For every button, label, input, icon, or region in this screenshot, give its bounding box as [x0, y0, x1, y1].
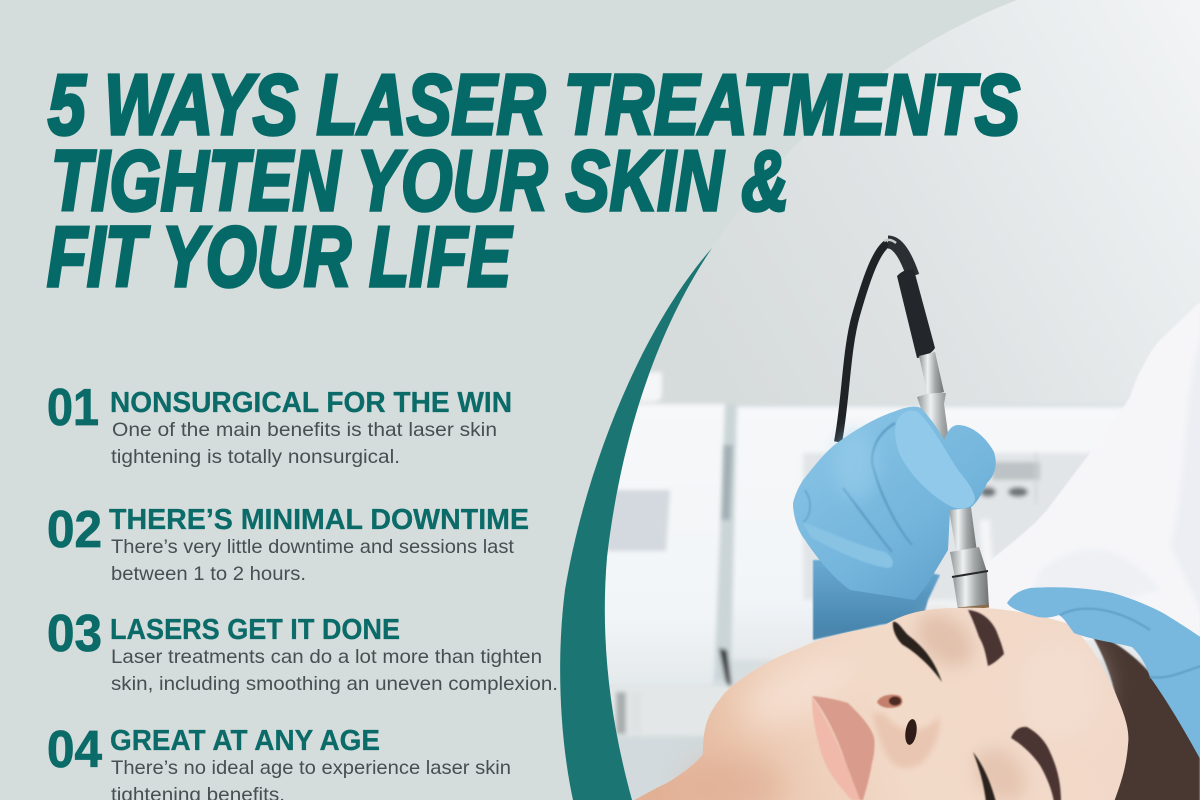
body 03: Laser treatments can do a lot more than tighten	[111, 646, 542, 668]
title	[47, 58, 1020, 305]
face: nose shading	[872, 712, 940, 768]
item 03	[47, 605, 558, 695]
glove lower finger	[802, 522, 893, 568]
body 04: There’s no ideal age to experience laser skin	[111, 757, 511, 779]
body 04	[111, 757, 511, 800]
teal crescent	[560, 248, 712, 800]
item 04	[47, 721, 511, 800]
face: upper eyebrow	[968, 610, 1004, 666]
face: lower eye socket shading	[972, 746, 1028, 800]
face: cheek side shading	[685, 755, 785, 800]
photo: white treatment machines	[605, 371, 1142, 735]
heading 02: THERE’S MINIMAL DOWNTIME	[109, 504, 529, 536]
photo: black cable	[838, 240, 913, 442]
photo: glove on forehead	[1007, 587, 1200, 768]
photo: woman's hair	[1090, 632, 1200, 800]
body 02: between 1 to 2 hours.	[111, 563, 306, 585]
title: FIT YOUR LIFE	[47, 210, 513, 305]
face: lower closed eye	[973, 752, 996, 800]
heading 01: NONSURGICAL FOR THE WIN	[110, 387, 512, 419]
face: lower eyebrow	[1011, 727, 1061, 800]
body 01: tightening is totally nonsurgical.	[111, 446, 400, 468]
face: nostrils	[877, 695, 918, 746]
body 02: There’s very little downtime and sessions last	[111, 536, 515, 558]
face: eye socket shading	[914, 606, 976, 670]
face: lips	[812, 696, 875, 800]
photo: laser skin treatment	[600, 0, 1200, 800]
glove index finger	[895, 410, 975, 508]
face: cheek highlight	[744, 636, 844, 728]
photo: laser wand	[897, 270, 989, 610]
heading 04: GREAT AT ANY AGE	[110, 725, 380, 757]
face: temple highlight	[1094, 639, 1119, 700]
body 01: One of the main benefits is that laser skin	[112, 419, 497, 441]
number 03: 03	[47, 605, 102, 663]
item 01	[47, 379, 512, 468]
body 03: skin, including smoothing an uneven complexion.	[111, 673, 558, 695]
number 04: 04	[47, 721, 102, 779]
body 03	[111, 646, 558, 695]
body 02	[111, 536, 515, 585]
photo: blue gloved hand	[793, 407, 996, 640]
photo: woman's face	[630, 603, 1128, 800]
photo: white doctor coat	[986, 302, 1200, 640]
title: TIGHTEN YOUR SKIN &	[51, 134, 789, 229]
body 01	[111, 419, 497, 468]
face: upper closed eye	[893, 622, 942, 682]
number 01: 01	[47, 379, 99, 437]
number 02: 02	[47, 501, 102, 559]
glove palm	[793, 407, 996, 600]
glove cuff	[813, 560, 940, 640]
photo: clinic wall	[800, 0, 1200, 404]
item 02	[47, 501, 529, 585]
heading 03: LASERS GET IT DONE	[110, 614, 400, 646]
